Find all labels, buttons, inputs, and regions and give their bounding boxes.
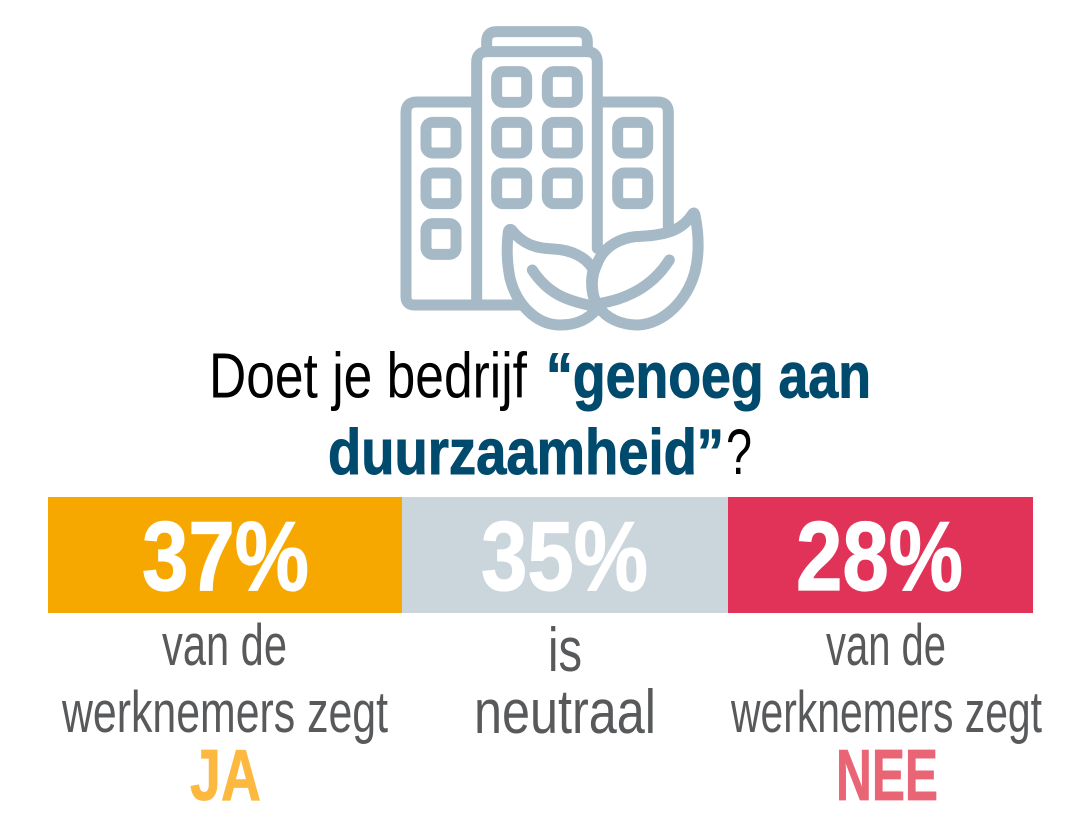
heading (209, 340, 871, 488)
heading: “genoeg aan (546, 340, 871, 412)
label: neutraal (474, 616, 656, 747)
heading: ? (726, 416, 752, 488)
label: ja: JA (190, 736, 261, 816)
stacked percentage bar (48, 497, 1033, 613)
label: nee (730, 613, 1042, 816)
label: nee: van de (826, 613, 946, 678)
segment: 37% ja (48, 497, 402, 613)
label: ja: van de (162, 613, 287, 678)
label: ja: werknemers zegt (61, 680, 388, 745)
segment: 28% nee (728, 497, 1033, 613)
label: neutraal: neutraal (474, 678, 656, 747)
heading: duurzaamheid” (328, 416, 724, 488)
label: nee: NEE (836, 736, 938, 816)
label: neutraal: is (548, 616, 582, 685)
segment: 35% neutraal: 35% (481, 501, 648, 611)
segment: 37% ja: 37% (142, 501, 309, 611)
segment: 35% neutraal (402, 497, 728, 613)
segment: 28% nee: 28% (796, 501, 963, 611)
heading: Doet je bedrijf (209, 340, 527, 412)
label: ja (61, 613, 388, 816)
icon: office building with leaves (406, 32, 698, 325)
